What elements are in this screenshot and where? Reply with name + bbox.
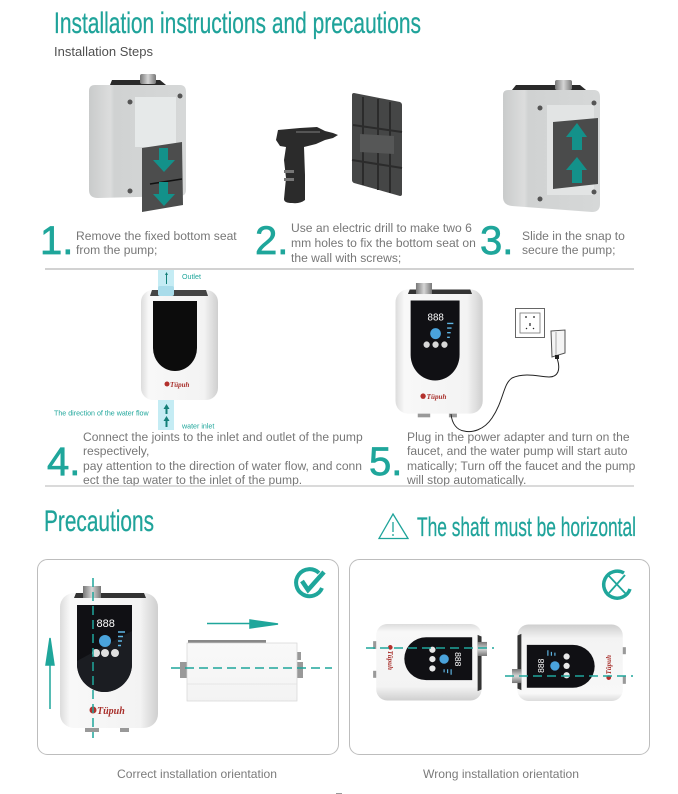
label: flow direction: The direction of the water flow [54, 410, 150, 418]
step 2 illustration: bottom seat plate [352, 93, 402, 196]
step 4 caption [47, 430, 363, 487]
pump front: 888 [428, 313, 444, 324]
title: Installation instructions and precautions [54, 7, 421, 40]
pump upright: 888 [96, 618, 115, 630]
icon: wall socket [516, 308, 544, 338]
icon: down arrow [153, 148, 175, 172]
pump side view [180, 640, 303, 701]
heading: precautions: Precautions [44, 505, 154, 538]
step 2 caption: 2. [255, 219, 288, 263]
horizontal dashed axis [171, 667, 332, 669]
step 4 illustration: pump with water flow [54, 270, 218, 430]
step 4 caption: respectively, [83, 444, 149, 458]
step 5 illustration: pump with adapter [396, 283, 565, 432]
step 3 caption: secure the pump; [522, 243, 615, 257]
arrow right [207, 620, 278, 628]
pump front: Tüpuh [427, 393, 446, 401]
pump upright [60, 586, 158, 732]
step 4 caption: ect the tap water to the inlet of the pump. [83, 473, 302, 487]
pump rotated right: 888 [453, 652, 463, 667]
step 1 caption [40, 219, 237, 263]
panel: wrong orientation [350, 560, 650, 754]
pump front [396, 283, 483, 417]
inlet pipe [158, 398, 174, 430]
outlet pipe [158, 270, 174, 290]
step 4 caption: Connect the joints to the inlet and outlet of the pump [83, 430, 363, 444]
panel: correct orientation [38, 560, 338, 754]
label: outlet: Outlet [182, 273, 201, 281]
step 3 illustration: pump box with seat attached [503, 80, 600, 212]
pump upright: Tüpuh [97, 706, 125, 717]
step 5 caption: will stop automatically. [406, 473, 526, 487]
step 1 caption: from the pump; [76, 243, 157, 257]
pump rotated left: 888 [536, 658, 546, 673]
step 1 caption: 1. [40, 219, 73, 263]
step 5 caption: 5. [369, 440, 402, 484]
step 5 caption [369, 430, 636, 487]
icon: power adapter [551, 330, 565, 359]
label: water inlet: water inlet [181, 422, 214, 430]
pump rotated right [373, 624, 487, 700]
step 3 caption: Slide in the snap to [522, 229, 625, 243]
caption: correct orientation: Correct installation orientation [117, 767, 277, 781]
icon: up arrow [566, 123, 587, 150]
pump rotated left [512, 625, 626, 701]
dashed axis right pump [505, 675, 633, 677]
pump rotated right: Tüpuh [386, 651, 394, 670]
step 5 caption: faucet, and the water pump will start auto [407, 444, 628, 458]
icon: warning triangle [379, 514, 408, 538]
step 4 caption: pay attention to the direction of water flow, and conn [83, 459, 362, 473]
icon: check mark [296, 569, 324, 596]
step 4 caption: 4. [47, 440, 80, 484]
step 5 caption: Plug in the power adapter and turn on the [407, 430, 630, 444]
step 1 illustration: pump box with seat removed [89, 74, 186, 212]
step 2 caption [255, 219, 476, 265]
step 2 caption: mm holes to fix the bottom seat on [291, 236, 476, 250]
dashed axis left pump [366, 647, 494, 649]
step 3 caption: 3. [480, 219, 513, 263]
step 2 caption: the wall with screws; [291, 251, 401, 265]
icon: down arrow lower [153, 182, 175, 206]
pump rotated left: Tüpuh [605, 655, 613, 674]
step 1 caption: Remove the fixed bottom seat [76, 229, 237, 243]
icon: cross mark [604, 571, 630, 598]
power cord [451, 358, 559, 432]
vertical dashed axis [92, 578, 94, 738]
caption: wrong orientation: Wrong installation orientation [423, 767, 579, 781]
subheading: installation steps: Installation Steps [54, 45, 153, 59]
arrow up [46, 638, 54, 709]
step 2 illustration: drill [276, 127, 338, 203]
step 2 caption: Use an electric drill to make two 6 [291, 221, 472, 235]
step 5 caption: matically; Turn off the faucet and the pump [407, 459, 636, 473]
step 3 caption [480, 219, 625, 263]
icon: up arrow lower [566, 157, 587, 183]
step 4 illustration: pump with water flow: Tüpuh [170, 381, 190, 389]
